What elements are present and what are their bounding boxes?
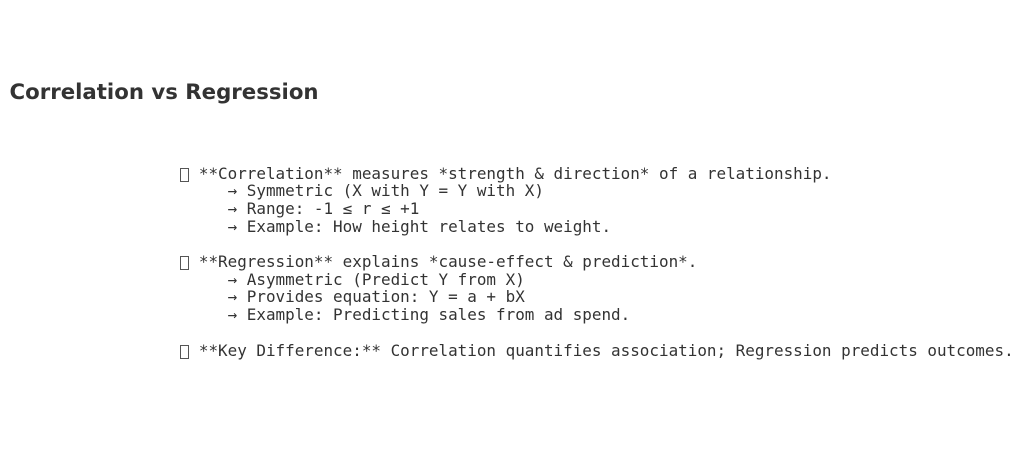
text block: regression: → Provides equation: Y = a + bX — [228, 287, 525, 306]
title: Correlation vs Regression — [10, 80, 319, 105]
text block: regression: **Regression** explains *cause-effect & prediction*. — [199, 252, 697, 271]
text block: correlation: → Range: -1 ≤ r ≤ +1 — [228, 199, 419, 218]
text block: key difference: **Key Difference:** Correlation quantifies association; Regression predicts outcomes. — [199, 340, 1014, 360]
text block: correlation: **Correlation** measures *strength & direction* of a relationship. — [199, 164, 832, 182]
icon: regression bullet — [180, 256, 188, 270]
text block: correlation — [199, 164, 832, 236]
icon: correlation bullet — [180, 168, 188, 182]
icon: key difference bullet — [180, 345, 188, 359]
text block: regression — [199, 252, 697, 324]
text block: correlation: → Symmetric (X with Y = Y with X) — [228, 181, 544, 200]
text block: regression: → Example: Predicting sales from ad spend. — [228, 305, 630, 324]
text block: correlation: → Example: How height relates to weight. — [228, 217, 611, 236]
text block: regression: → Asymmetric (Predict Y from X) — [228, 270, 525, 289]
